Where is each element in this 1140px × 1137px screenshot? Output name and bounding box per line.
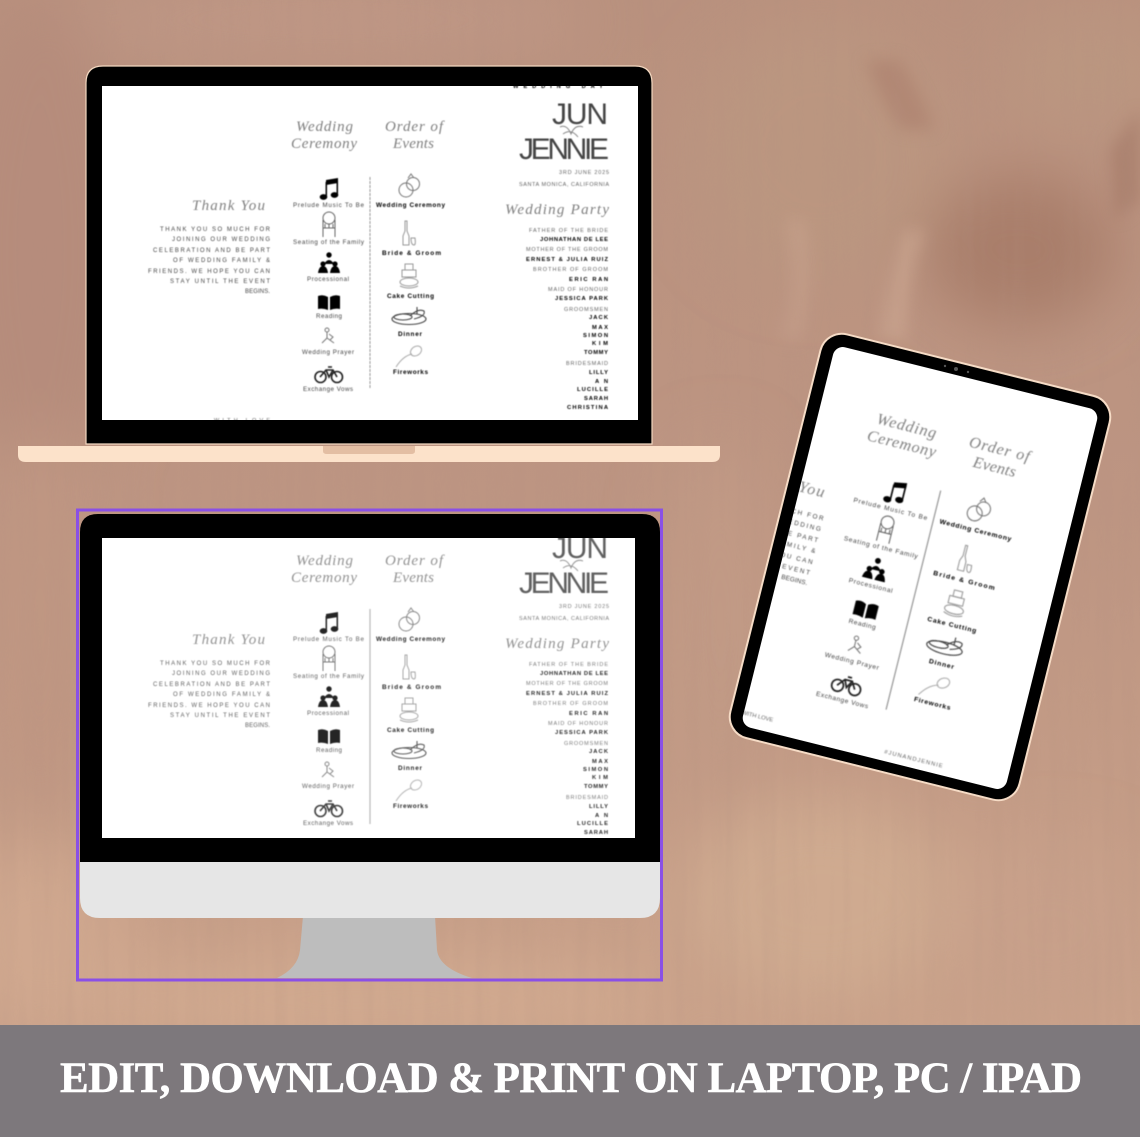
thank you paragraph: FRIENDS. WE HOPE YOU CAN [148,269,270,275]
couple names: JENNIE [519,133,609,166]
date and venue: 3RD JUNE 2025 [559,170,609,176]
thank you paragraph: CELEBRATION AND BE PART [153,682,270,688]
label: exchange vows: Exchange Vows [303,386,353,393]
couple names [519,532,609,600]
label: exchange vows: Exchange Vows [815,690,870,710]
clipped top text: WEDDING DAY [513,84,603,90]
icon: prayer [322,328,334,343]
label: seating: Seating of the Family [293,673,365,680]
tablet camera [944,365,969,373]
label: reading: Reading [316,313,343,320]
thank you paragraph: THANK YOU SO MUCH FOR [160,227,271,233]
icon: rings [966,495,993,524]
laptop lid [86,66,652,444]
icon: rings [399,174,420,197]
wedding party list: AN [595,813,608,819]
wedding party list: JESSICA PARK [555,296,609,302]
label: bride and groom: Bride & Groom [382,250,441,257]
icon: sparkler [396,778,423,801]
icon: book [318,729,340,744]
label: prelude music: Prelude Music To Be [293,636,365,643]
label: prayer: Wedding Prayer [302,349,354,356]
wedding party list: BROTHER OF GROOM [533,701,608,707]
laptop base notch [323,446,415,454]
thank you paragraph: THANK YOU SO MUCH FOR [160,661,271,667]
wedding party list: ERIC RAN [569,711,608,717]
heading: Order of Events: Events [392,570,434,586]
wedding party list: MOTHER OF THE GROOM [526,247,608,253]
label: dinner: Dinner [398,765,422,772]
heading: Wedding Ceremony: Ceremony [291,136,357,152]
wedding party list: BROTHER OF GROOM [533,267,608,273]
wedding party list: LUCILLE [577,387,608,393]
wedding party list: SARAH [584,396,608,402]
icon: plate [392,741,426,758]
wedding party list: SIMON [583,333,608,339]
thank you paragraph: JOINING OUR WEDDING [172,237,270,243]
wedding party list: AN [595,379,608,385]
wedding party list: SARAH [584,830,608,836]
label: bride and groom: Bride & Groom [382,684,441,691]
thank you paragraph: FRIENDS. WE HOPE YOU CAN [685,528,814,566]
wedding party list: JESSICA PARK [555,730,609,736]
label: fireworks: Fireworks [913,696,951,712]
icon: book [852,600,879,621]
wedding party list: BRIDESMAID [566,361,608,367]
heading: Order of Events: Order of [385,119,445,135]
icon: prayer [322,762,334,777]
thank you paragraph: OF WEDDING FAMILY & [173,692,270,698]
ceremony column [293,178,365,393]
icon: bottle [957,545,976,573]
icon: bicycle [315,367,342,382]
wedding party list: CHRISTINA [567,405,609,411]
thank you paragraph: STAY UNTIL THE EVENT [705,544,811,577]
thank you paragraph: JOINING OUR WEDDING [718,501,822,533]
label: wedding ceremony: Wedding Ceremony [939,518,1012,543]
thank you paragraph [680,484,825,587]
icon: sparkler [396,344,423,367]
thank you paragraph: THANK YOU SO MUCH FOR [708,487,824,523]
bottom banner [0,1025,1140,1137]
label: prelude music: Prelude Music To Be [853,497,928,522]
icon: bottle [403,221,415,245]
wedding party list: TOMMY [584,784,608,790]
wedding party list: ERNEST & JULIA RUIZ [526,691,608,697]
couple names [519,102,609,160]
events column [376,174,445,376]
label: wedding ceremony: Wedding Ceremony [376,202,445,209]
laptop screen [102,86,638,420]
wedding party list: KIM [592,341,608,347]
heading: Thank You: Thank You [746,466,826,501]
thank you paragraph: OF WEDDING FAMILY & [173,258,270,264]
banner background [0,1025,1140,1137]
date and venue: SANTA MONICA, CALIFORNIA [519,616,609,622]
thank you paragraph [148,227,271,295]
label: dinner: Dinner [928,658,955,671]
wedding party list: LILLY [589,370,608,376]
icon: music note [320,612,338,634]
date and venue [519,170,609,188]
thank you paragraph: BEGINS. [780,574,808,587]
label: dinner: Dinner [398,331,422,338]
events column [376,608,445,810]
wedding party list: GROOMSMEN [564,307,608,313]
wedding party list: MOTHER OF THE GROOM [526,681,608,687]
clipped bottom text: WITH LOVE [214,418,270,424]
label: cake cutting: Cake Cutting [387,727,434,734]
icon: bottle [403,655,415,679]
label: prayer: Wedding Prayer [824,652,880,672]
heading: Wedding Ceremony [291,119,357,152]
banner text: EDIT, DOWNLOAD & PRINT ON LAPTOP, PC / IPAD [60,1055,1082,1102]
wedding party list: JACK [589,315,609,321]
wedding party list [526,228,609,411]
label: fireworks: Fireworks [393,803,428,810]
tablet device [645,329,1115,805]
label: exchange vows: Exchange Vows [303,820,353,827]
wedding party list [526,662,609,836]
tablet screen document [645,373,1034,773]
icon: chair [323,212,335,237]
date and venue [519,604,609,622]
heading: Order of Events: Order of [967,434,1034,466]
thank you paragraph: CELEBRATION AND BE PART [153,248,270,254]
ceremony column [805,472,935,713]
thank you paragraph: BEGINS. [245,289,270,295]
label: processional: Processional [848,577,894,595]
wedding party list: LUCILLE [577,821,608,827]
wedding party list: ERNEST & JULIA RUIZ [526,257,608,263]
wedding party list: KIM [592,775,608,781]
wedding party list: MAID OF HONOUR [548,721,608,727]
couple names: JENNIE [519,567,609,600]
icon: bicycle [830,674,863,697]
heading: Wedding Ceremony: Wedding [296,119,354,135]
wedding party list: BRIDESMAID [566,795,608,801]
monitor screen document [148,532,609,836]
label: processional: Processional [307,710,349,717]
wedding party list: MAID OF HONOUR [548,287,608,293]
monitor screen [102,538,635,838]
icon: music note [320,178,338,200]
thank you paragraph: STAY UNTIL THE EVENT [170,279,270,285]
laptop screen document [148,84,609,424]
wedding party list: JOHNATHAN DE LEE [540,671,608,677]
wedding party list: ERIC RAN [569,277,608,283]
thank you paragraph: OF WEDDING FAMILY & [714,523,817,555]
icon: sparkler [918,671,953,702]
heading: Thank You: Thank You [192,198,265,214]
wedding party list: GROOMSMEN [564,741,608,747]
heading: Order of Events: Order of [385,553,445,569]
icon: plate [925,631,965,658]
label: fireworks: Fireworks [393,369,428,376]
date and venue: SANTA MONICA, CALIFORNIA [519,182,609,188]
heading: Wedding Party: Wedding Party [505,202,609,218]
icon: cake [400,264,418,288]
icon: prayer [848,635,864,654]
events column [895,489,1020,716]
thank you paragraph: CELEBRATION AND BE PART [696,507,819,544]
thank you paragraph: BEGINS. [245,723,270,729]
icon: cake [943,589,968,618]
icon: people [318,686,340,707]
thank you paragraph [148,661,271,729]
date and venue: 3RD JUNE 2025 [559,604,609,610]
couple names: JUN [552,98,608,131]
label: prayer: Wedding Prayer [302,783,354,790]
icon: bicycle [315,801,342,816]
label: wedding ceremony: Wedding Ceremony [376,636,445,643]
laptop device [18,66,720,462]
desktop monitor device [78,510,662,980]
purple selection frame [78,510,662,980]
heading: Wedding Ceremony: Wedding [875,411,938,442]
label: bride and groom: Bride & Groom [932,570,995,592]
icon: people [318,252,340,273]
heading: Wedding Ceremony: Wedding [296,553,354,569]
monitor chin [80,860,660,918]
tablet body [725,329,1115,805]
heading: Order of Events [385,553,445,586]
monitor stand [277,916,472,978]
timeline divider [369,177,371,388]
monitor bezel [80,514,660,862]
label: reading: Reading [848,618,877,632]
wedding party list: TOMMY [584,350,608,356]
wedding party list: MAX [592,325,608,331]
icon: cake [400,698,418,722]
couple names: JUN [552,532,608,565]
heading: Wedding Ceremony [291,553,357,586]
icon: people [862,555,890,582]
footer: with love: WITH LOVE [741,710,774,724]
heading: Order of Events [963,434,1034,484]
footer: hashtag: #JUNANDJENNIE [884,749,943,770]
laptop base [18,446,720,462]
thank you paragraph: JOINING OUR WEDDING [172,671,270,677]
ceremony column [293,612,365,827]
icon: music note [883,479,908,506]
tablet screen [741,345,1099,791]
heading: Wedding Ceremony [865,410,943,461]
heading: Order of Events: Events [970,454,1018,481]
wedding party list: SIMON [583,767,608,773]
thank you paragraph: FRIENDS. WE HOPE YOU CAN [148,703,270,709]
timeline divider [886,491,941,710]
heading: Thank You: Thank You [192,632,265,648]
label: processional: Processional [307,276,349,283]
label: cake cutting: Cake Cutting [927,616,977,635]
heading: Order of Events: Events [392,136,434,152]
label: cake cutting: Cake Cutting [387,293,434,300]
heading: Order of Events [385,119,445,152]
label: reading: Reading [316,747,343,754]
timeline divider [369,609,371,824]
wedding party list: JACK [589,749,609,755]
wedding party list: FATHER OF THE BRIDE [529,228,608,234]
heading: Wedding Party: Wedding Party [505,636,609,652]
wedding party list: MAX [592,759,608,765]
thank you paragraph: STAY UNTIL THE EVENT [170,713,270,719]
icon: chair [876,515,895,544]
icon: chair [323,646,335,671]
wedding party list: LILLY [589,804,608,810]
heading: Wedding Ceremony: Ceremony [865,427,939,461]
icon: book [318,295,340,310]
label: prelude music: Prelude Music To Be [293,202,365,209]
label: seating: Seating of the Family [293,239,365,246]
label: seating: Seating of the Family [843,535,919,561]
wedding party list: FATHER OF THE BRIDE [529,662,608,668]
wedding party list: JOHNATHAN DE LEE [540,237,608,243]
icon: rings [399,608,420,631]
heading: Wedding Ceremony: Ceremony [291,570,357,586]
icon: plate [392,307,426,324]
